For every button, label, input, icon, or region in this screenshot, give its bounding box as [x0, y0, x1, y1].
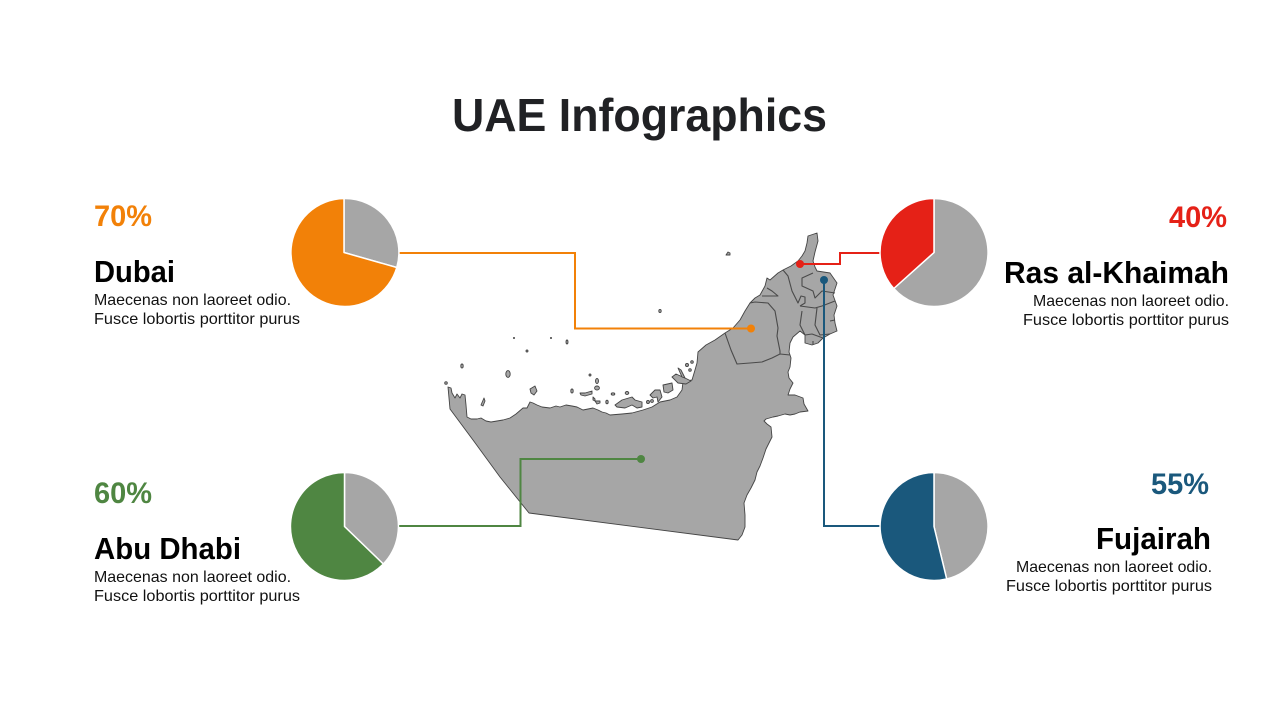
text block: Abu Dhabi: Abu Dhabi — [94, 531, 241, 566]
text block: Ras al-Khaimah — [1004, 201, 1229, 329]
text block: Fujairah: 55% — [1151, 468, 1209, 501]
title: UAE Infographics — [452, 89, 827, 141]
text block: Fujairah: Fusce lobortis porttitor purus — [1006, 578, 1212, 595]
connector: Fujairah — [820, 276, 880, 526]
text block: Abu Dhabi — [94, 477, 300, 605]
pie: Ras al-Khaimah — [880, 198, 988, 306]
text block: Fujairah — [1006, 468, 1212, 595]
text block: Ras al-Khaimah: 40% — [1169, 201, 1227, 234]
text block: Dubai — [94, 200, 300, 328]
text block: Dubai: Dubai — [94, 254, 175, 289]
text block: Dubai: Fusce lobortis porttitor purus — [94, 311, 300, 328]
text block: Fujairah: Maecenas non laoreet odio. — [1016, 559, 1212, 576]
map mainland — [448, 233, 837, 540]
text block: Ras al-Khaimah: Fusce lobortis porttitor purus — [1023, 312, 1229, 329]
text block: Fujairah: Fujairah — [1096, 521, 1211, 556]
connector: Ras al-Khaimah — [796, 253, 880, 268]
text block: Abu Dhabi: 60% — [94, 477, 152, 510]
pie: Dubai — [291, 198, 399, 306]
pie: Fujairah — [880, 472, 988, 580]
text block: Dubai: Maecenas non laoreet odio. — [94, 292, 291, 309]
map: UAE — [445, 233, 837, 540]
pie: Abu Dhabi — [290, 472, 398, 580]
text block: Ras al-Khaimah: Maecenas non laoreet odio. — [1033, 293, 1229, 310]
map emirate borders — [725, 270, 835, 364]
text block: Ras al-Khaimah: Ras al-Khaimah — [1004, 255, 1229, 290]
text block: Abu Dhabi: Maecenas non laoreet odio. — [94, 569, 291, 586]
connector: Dubai — [399, 253, 755, 332]
map islands — [726, 252, 730, 255]
text block: Dubai: 70% — [94, 200, 152, 233]
text block: Abu Dhabi: Fusce lobortis porttitor purus — [94, 588, 300, 605]
connector: Abu Dhabi — [399, 455, 645, 526]
